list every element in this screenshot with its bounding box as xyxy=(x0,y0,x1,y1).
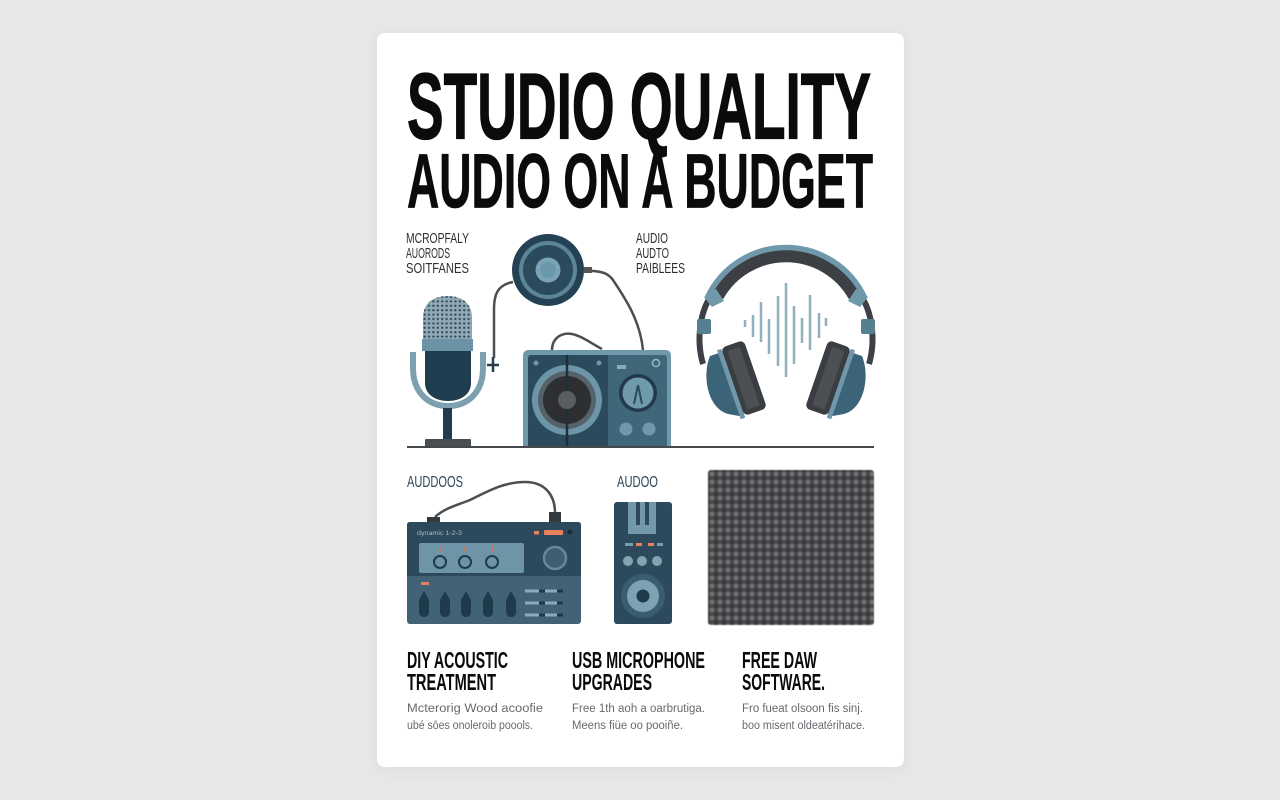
icon: headphones xyxy=(697,248,875,419)
icon: audio mixer xyxy=(407,482,581,624)
panel: acoustic foam texture xyxy=(708,470,874,625)
text block: microphone description: Free 1th aoh a oarbrutiga. xyxy=(572,703,705,715)
heading: diy acoustic treatment xyxy=(407,647,508,695)
icon: speaker disc xyxy=(512,234,592,306)
icon: cables xyxy=(487,270,643,372)
icon: portable device xyxy=(614,502,672,624)
heading: usb microphone upgrades xyxy=(572,647,705,695)
text block: top middle label xyxy=(636,231,685,277)
heading: diy acoustic treatment: DIY ACOUSTIC xyxy=(407,647,508,673)
text block: top middle label: AUDIO xyxy=(636,231,668,247)
text block: top left label: AUORODS xyxy=(406,246,450,262)
text block: acoustic description: Mcterorig Wood acoofie xyxy=(407,703,543,715)
baseline rule xyxy=(407,446,874,448)
text block: software description xyxy=(742,703,865,732)
text block: software description: Fro fueat olsoon fis sinj. xyxy=(742,703,863,715)
heading: free daw software: SOFTWARE. xyxy=(742,669,825,695)
heading: diy acoustic treatment: TREATMENT xyxy=(407,669,496,695)
text block: acoustic description xyxy=(407,703,543,732)
heading: usb microphone upgrades: UPGRADES xyxy=(572,669,652,695)
icon: microphone xyxy=(413,296,483,447)
panel: poster card xyxy=(377,33,904,767)
text block: microphone description: Meens fiüe oo pooiñe. xyxy=(572,720,683,732)
heading: free daw software xyxy=(742,647,825,695)
heading: free daw software: FREE DAW xyxy=(742,647,817,673)
title: STUDIO QUALITY xyxy=(407,54,871,158)
text block: software description: boo misent oldeatérihace. xyxy=(742,720,865,732)
text block: acoustic description: ubé sōes onoleroib poools. xyxy=(407,720,533,732)
text block: top middle label: AUDTO xyxy=(636,246,669,262)
label: mixer heading: AUDDOOS xyxy=(407,474,463,491)
title xyxy=(407,54,873,224)
label: device heading: AUDOO xyxy=(617,474,658,491)
text block: top left label: SOITFANES xyxy=(406,261,469,277)
text block: top middle label: PAIBLEES xyxy=(636,261,685,277)
heading: usb microphone upgrades: USB MICROPHONE xyxy=(572,647,705,673)
title: AUDIO ON A BUDGET xyxy=(407,138,873,224)
text block: microphone description xyxy=(572,703,705,732)
text block: top left label: MCROPFALY xyxy=(406,231,469,247)
icon: speaker amp xyxy=(523,350,671,447)
label: mixer small print: dynamic 1-2-3 xyxy=(417,531,463,537)
text block: top left label xyxy=(406,231,469,277)
icon: sound wave xyxy=(745,283,826,377)
